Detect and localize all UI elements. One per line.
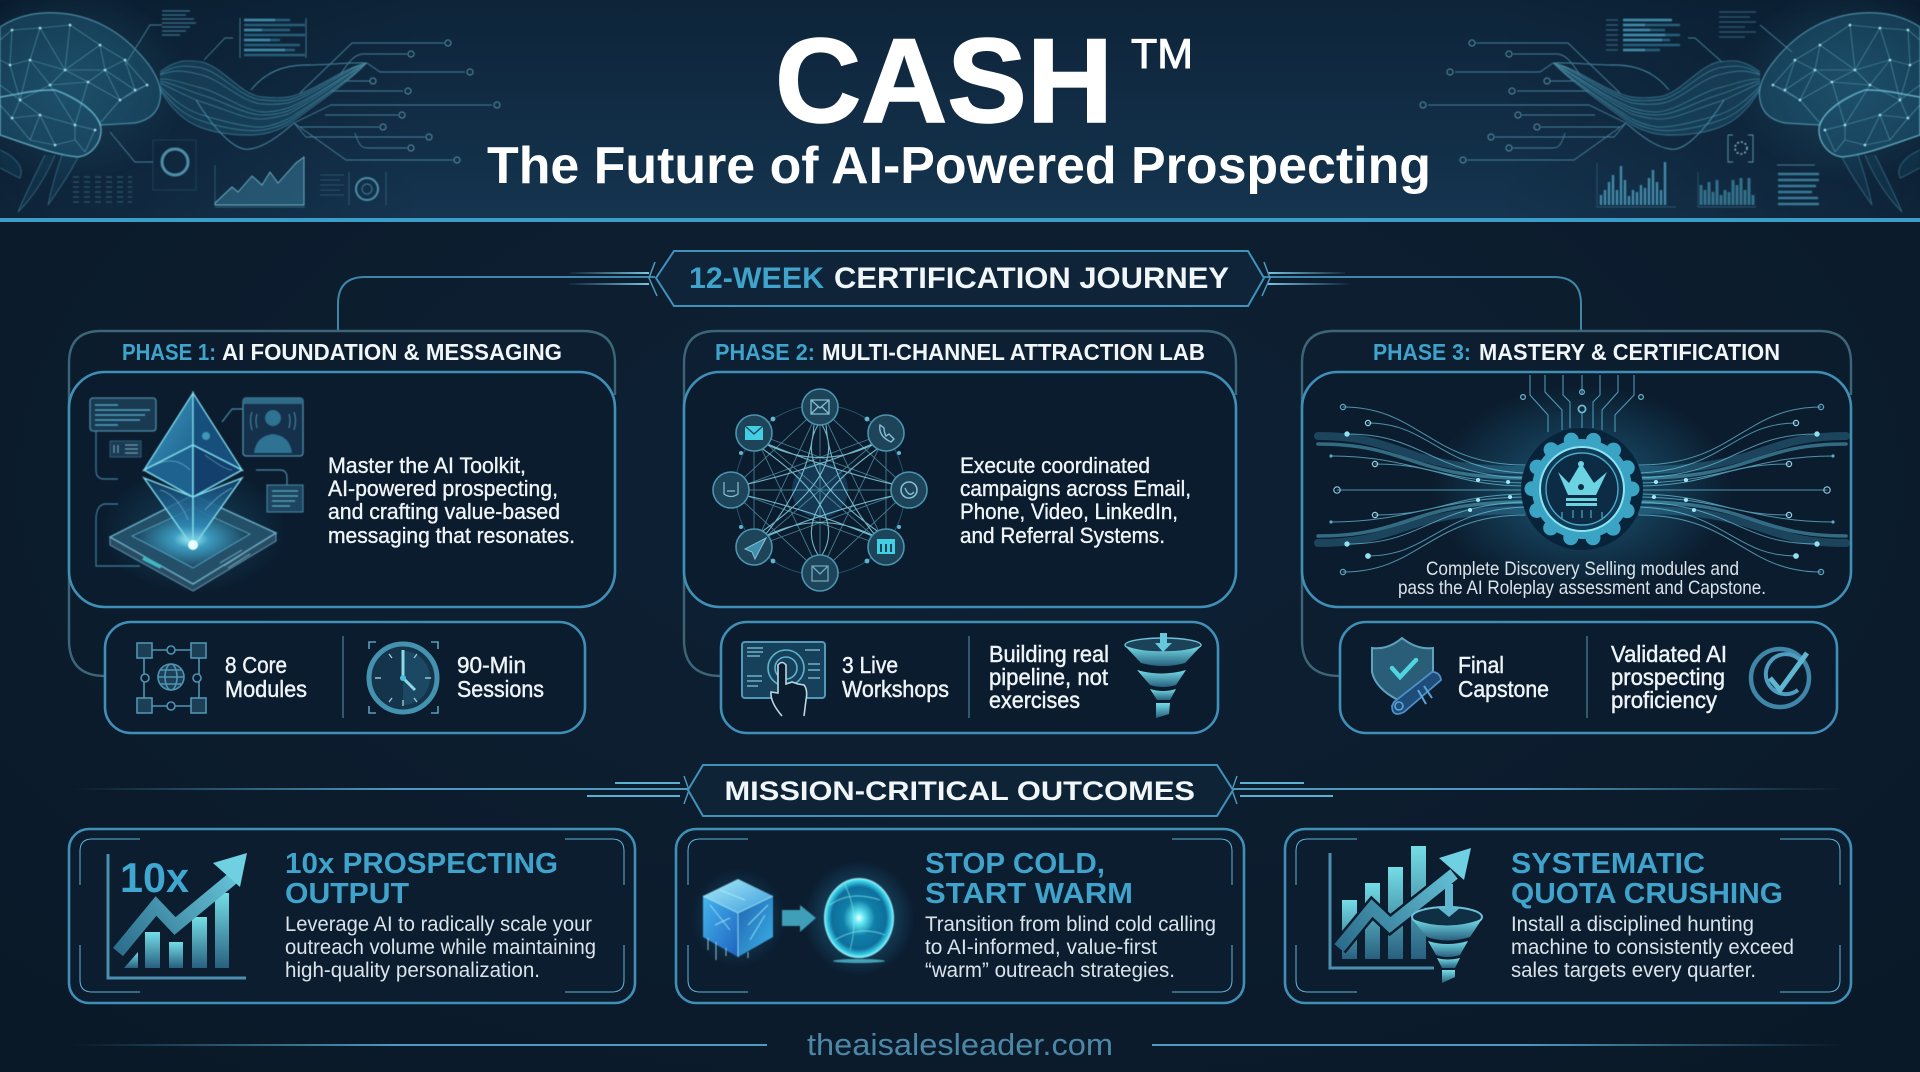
- phase 1 description: [328, 453, 575, 548]
- outcome card: systematic quota crushing: [1285, 829, 1851, 1003]
- systematic heading: SYSTEMATIC: [1511, 848, 1705, 880]
- footer website: theaisalesleader.com: [807, 1027, 1113, 1062]
- building real pipeline label: [989, 641, 1109, 713]
- phase 3 stats box: [1340, 622, 1837, 733]
- icon: check target: [1751, 649, 1809, 707]
- icon: core modules: [137, 643, 206, 713]
- 3 live workshops label: 3 Live: [842, 652, 898, 678]
- validated proficiency label: Validated AI: [1611, 641, 1727, 667]
- phase 1 description: AI-powered prospecting,: [328, 476, 558, 501]
- 10x heading: 10x PROSPECTING: [285, 848, 558, 880]
- stop cold heading: STOP COLD,: [925, 848, 1105, 880]
- systematic heading: QUOTA CRUSHING: [1511, 878, 1783, 910]
- stop cold description: to AI-informed, value-first: [925, 935, 1157, 959]
- banner: 12-week certification journey: CERTIFICATION JOURNEY: [834, 262, 1229, 295]
- header band: [0, 0, 1920, 222]
- phase 2 heading: MULTI-CHANNEL ATTRACTION LAB: [822, 339, 1205, 365]
- final capstone label: [1458, 652, 1549, 702]
- icon: 10x growth chart: [108, 853, 247, 978]
- icon: funnel: [1125, 633, 1201, 718]
- 8 core modules label: 8 Core: [225, 652, 287, 678]
- phase 1 heading: PHASE 1:: [122, 339, 216, 365]
- icon: crown badge with circuits: [1318, 375, 1846, 595]
- banner: 12-week certification journey: 12-WEEK: [689, 262, 824, 295]
- phase 1 description: Master the AI Toolkit,: [328, 453, 526, 478]
- systematic description: [1511, 912, 1794, 982]
- validated proficiency label: [1611, 641, 1727, 713]
- outcome card: 10x prospecting output: [69, 829, 635, 1003]
- 10x heading: [285, 848, 558, 910]
- 10x description: [285, 912, 596, 982]
- icon: ice cube to warm orb: [690, 860, 915, 976]
- 3 live workshops label: [842, 652, 949, 702]
- banner: mission-critical outcomes: [688, 765, 1233, 816]
- outcome card: stop cold, start warm: [676, 829, 1244, 1003]
- systematic description: machine to consistently exceed: [1511, 935, 1794, 959]
- title: TM: [1131, 30, 1193, 77]
- phase 3 description: pass the AI Roleplay assessment and Capstone.: [1398, 577, 1766, 599]
- icon: multi-channel network: [713, 389, 927, 591]
- validated proficiency label: prospecting: [1611, 664, 1725, 690]
- icon: tablet and touch: [742, 642, 825, 716]
- phase 2 heading: PHASE 2:: [715, 339, 815, 365]
- building real pipeline label: exercises: [989, 687, 1080, 713]
- section divider lines: [73, 776, 1843, 804]
- icon: 10x growth chart: 10x: [120, 854, 190, 901]
- phase 2 description: [960, 453, 1191, 548]
- stop cold heading: START WARM: [925, 878, 1133, 910]
- phase 2 stats box: [721, 622, 1218, 733]
- connector lines from journey banner to phases: [338, 262, 1581, 331]
- final capstone label: Final: [1458, 652, 1504, 678]
- stop cold description: “warm” outreach strategies.: [925, 958, 1175, 982]
- 10x description: high-quality personalization.: [285, 958, 540, 982]
- phase 2 description: campaigns across Email,: [960, 476, 1191, 501]
- phase 2 description: Execute coordinated: [960, 453, 1150, 478]
- icon: shield and diploma: [1372, 638, 1441, 714]
- phase 1 heading: AI FOUNDATION & MESSAGING: [222, 339, 562, 365]
- header art: right brain and data charts: [1420, 0, 1920, 212]
- systematic heading: [1511, 848, 1783, 910]
- phase 3 heading: PHASE 3:: [1373, 339, 1471, 365]
- title: CASH: [775, 14, 1113, 148]
- panel: phase 3: [1302, 331, 1851, 733]
- stop cold description: [925, 912, 1216, 982]
- final capstone label: Capstone: [1458, 676, 1549, 702]
- building real pipeline label: pipeline, not: [989, 664, 1109, 690]
- building real pipeline label: Building real: [989, 641, 1109, 667]
- stop cold heading: [925, 848, 1133, 910]
- phase 2 description: Phone, Video, LinkedIn,: [960, 499, 1178, 524]
- 90-min sessions label: Sessions: [457, 676, 544, 702]
- 8 core modules label: Modules: [225, 676, 307, 702]
- subtitle: The Future of AI-Powered Prospecting: [487, 137, 1431, 195]
- 3 live workshops label: Workshops: [842, 676, 949, 702]
- icon: clock: [369, 642, 438, 713]
- stop cold description: Transition from blind cold calling: [925, 912, 1216, 936]
- banner: 12-week certification journey: [656, 251, 1264, 306]
- icon: crystal on AI platform: [90, 393, 303, 595]
- icon: growth chart and funnel: [1330, 846, 1482, 983]
- phase 3 description: [1398, 558, 1766, 599]
- 90-min sessions label: 90-Min: [457, 652, 526, 678]
- panel: phase 2: [684, 331, 1236, 733]
- phase 2 description: and Referral Systems.: [960, 523, 1165, 548]
- 10x description: outreach volume while maintaining: [285, 935, 596, 959]
- validated proficiency label: proficiency: [1611, 687, 1717, 713]
- systematic description: Install a disciplined hunting: [1511, 912, 1754, 936]
- 10x heading: OUTPUT: [285, 878, 409, 910]
- panel: phase 1: [69, 331, 615, 733]
- phase 1 stats box: [105, 622, 585, 733]
- 90-min sessions label: [457, 652, 544, 702]
- systematic description: sales targets every quarter.: [1511, 958, 1756, 982]
- phase 1 description: messaging that resonates.: [328, 523, 575, 548]
- 8 core modules label: [225, 652, 307, 702]
- phase 3 description: Complete Discovery Selling modules and: [1426, 558, 1739, 580]
- header art: left brain and data charts: [0, 0, 500, 212]
- 10x description: Leverage AI to radically scale your: [285, 912, 592, 936]
- banner: mission-critical outcomes: MISSION-CRITICAL OUTCOMES: [724, 776, 1195, 806]
- phase 3 heading: MASTERY & CERTIFICATION: [1479, 339, 1780, 365]
- phase 1 description: and crafting value-based: [328, 499, 560, 524]
